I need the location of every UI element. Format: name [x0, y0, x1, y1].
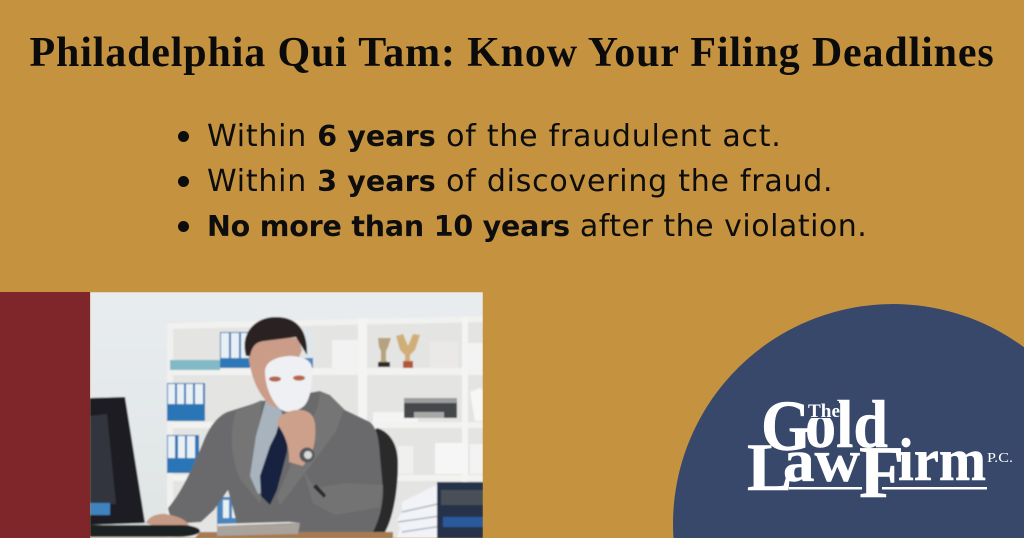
deadline: 10 years: No more than 10 years after the violation. — [207, 209, 867, 244]
title: Philadelphia Qui Tam: Know Your Filing Deadlines — [29, 30, 995, 76]
bullet list of filing deadlines — [178, 119, 867, 244]
jacket — [168, 391, 383, 532]
sleeve shading — [306, 478, 384, 514]
logo: The Gold Law Firm P.C.: aw — [783, 428, 861, 494]
logo: The Gold Law Firm P.C. — [747, 386, 1013, 514]
printer — [403, 402, 458, 419]
logo: The Gold Law Firm P.C.: P.C. — [987, 451, 1013, 466]
photo: businessman holding a white mask in an office — [90, 292, 483, 538]
maroon side band — [0, 292, 90, 538]
jacket right lapel — [277, 391, 344, 505]
mask — [265, 356, 312, 412]
hair — [245, 317, 307, 356]
logo: The Gold Law Firm P.C.: old — [805, 386, 888, 462]
logo: The Gold Law Firm P.C.: G — [761, 386, 811, 466]
keyboard — [90, 525, 200, 537]
logo: The Gold Law Firm P.C.: L — [747, 429, 792, 505]
chair — [372, 427, 399, 534]
paper stack — [397, 485, 438, 538]
sleeve buttons — [313, 484, 326, 498]
logo: The Gold Law Firm P.C.: irm — [898, 427, 986, 493]
binders — [220, 332, 250, 368]
watch — [300, 448, 314, 462]
logo: The Gold Law Firm P.C.: F — [859, 432, 904, 514]
trophies — [378, 338, 391, 367]
deadline: 6 years: Within 6 years of the fraudulent act. — [207, 119, 782, 154]
shelves — [174, 322, 482, 412]
logo: The Gold Law Firm P.C.: The — [808, 401, 840, 422]
hand on keyboard — [146, 514, 190, 528]
navy circle with firm logo — [673, 304, 1024, 538]
jacket left lapel — [232, 400, 262, 503]
monitor — [90, 397, 145, 525]
notebook — [217, 523, 300, 536]
tie — [260, 420, 288, 505]
shirt — [250, 400, 288, 494]
dark binders — [437, 482, 483, 538]
deadline: 3 years: Within 3 years of discovering the fraud. — [207, 164, 833, 199]
face — [248, 336, 302, 408]
desk — [195, 532, 393, 538]
white boxes — [332, 340, 359, 368]
hand — [277, 410, 315, 466]
navy circle — [673, 304, 1024, 538]
